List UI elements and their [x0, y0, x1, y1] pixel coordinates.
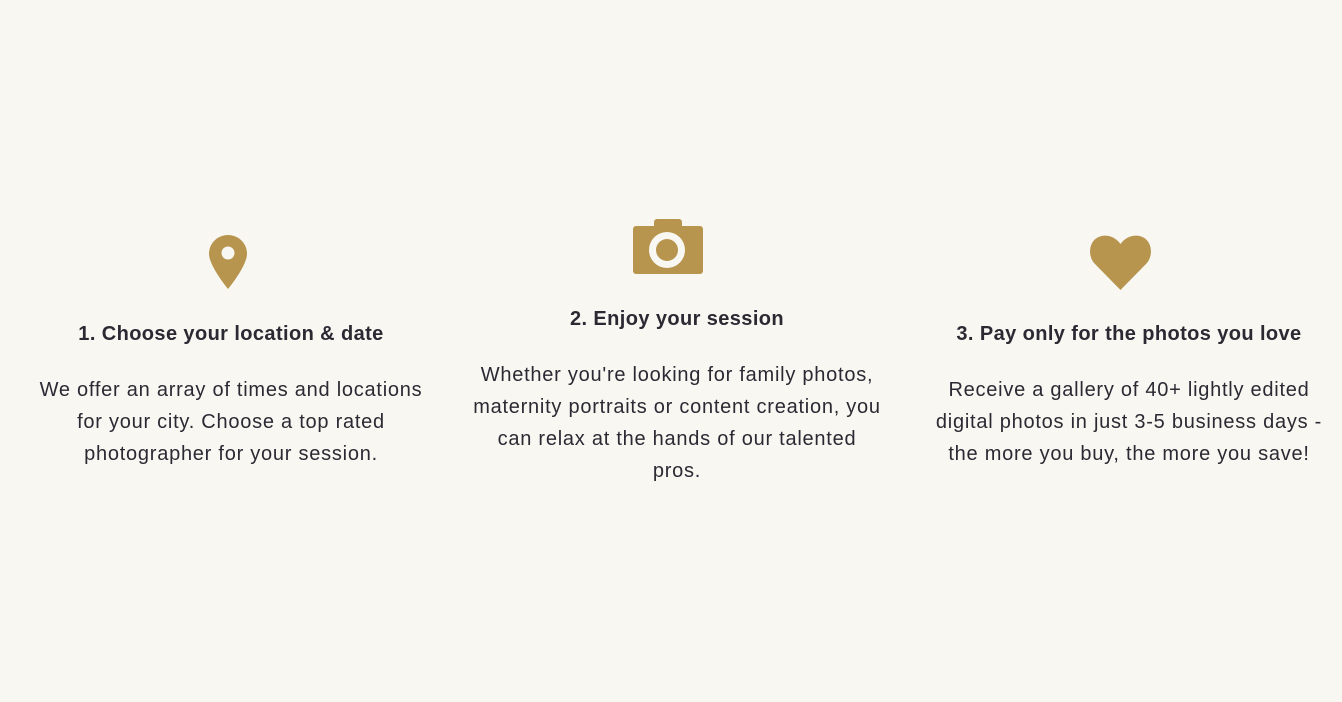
panel: step 3 [936, 236, 1322, 465]
icon: camera [633, 219, 703, 274]
panel: step 1 [40, 235, 422, 465]
heading: step 2: 2. Enjoy your session [570, 308, 784, 330]
heading: step 3: 3. Pay only for the photos you love [956, 323, 1302, 345]
text: step 3 description: the more you buy, the more you save! [948, 443, 1310, 465]
text: step 1 description: for your city. Choose a top rated [77, 411, 385, 433]
text: step 1 description [40, 379, 422, 465]
text: step 2 description: maternity portraits or content creation, you [473, 396, 881, 418]
panel: step 2 [473, 219, 881, 482]
text: step 1 description: We offer an array of times and locations [40, 379, 422, 401]
text: step 2 description: Whether you're looking for family photos, [481, 364, 873, 386]
text: step 2 description [473, 364, 881, 482]
heading: step 1: 1. Choose your location & date [78, 323, 384, 345]
text: step 3 description: digital photos in just 3-5 business days - [936, 411, 1322, 433]
text: step 3 description [936, 379, 1322, 465]
icon: location pin [209, 235, 247, 289]
text: step 2 description: can relax at the hands of our talented [498, 428, 856, 450]
text: step 2 description: pros. [653, 460, 701, 482]
text: step 3 description: Receive a gallery of 40+ lightly edited [948, 379, 1310, 401]
text: step 1 description: photographer for your session. [84, 443, 378, 465]
icon: heart [1090, 236, 1151, 290]
